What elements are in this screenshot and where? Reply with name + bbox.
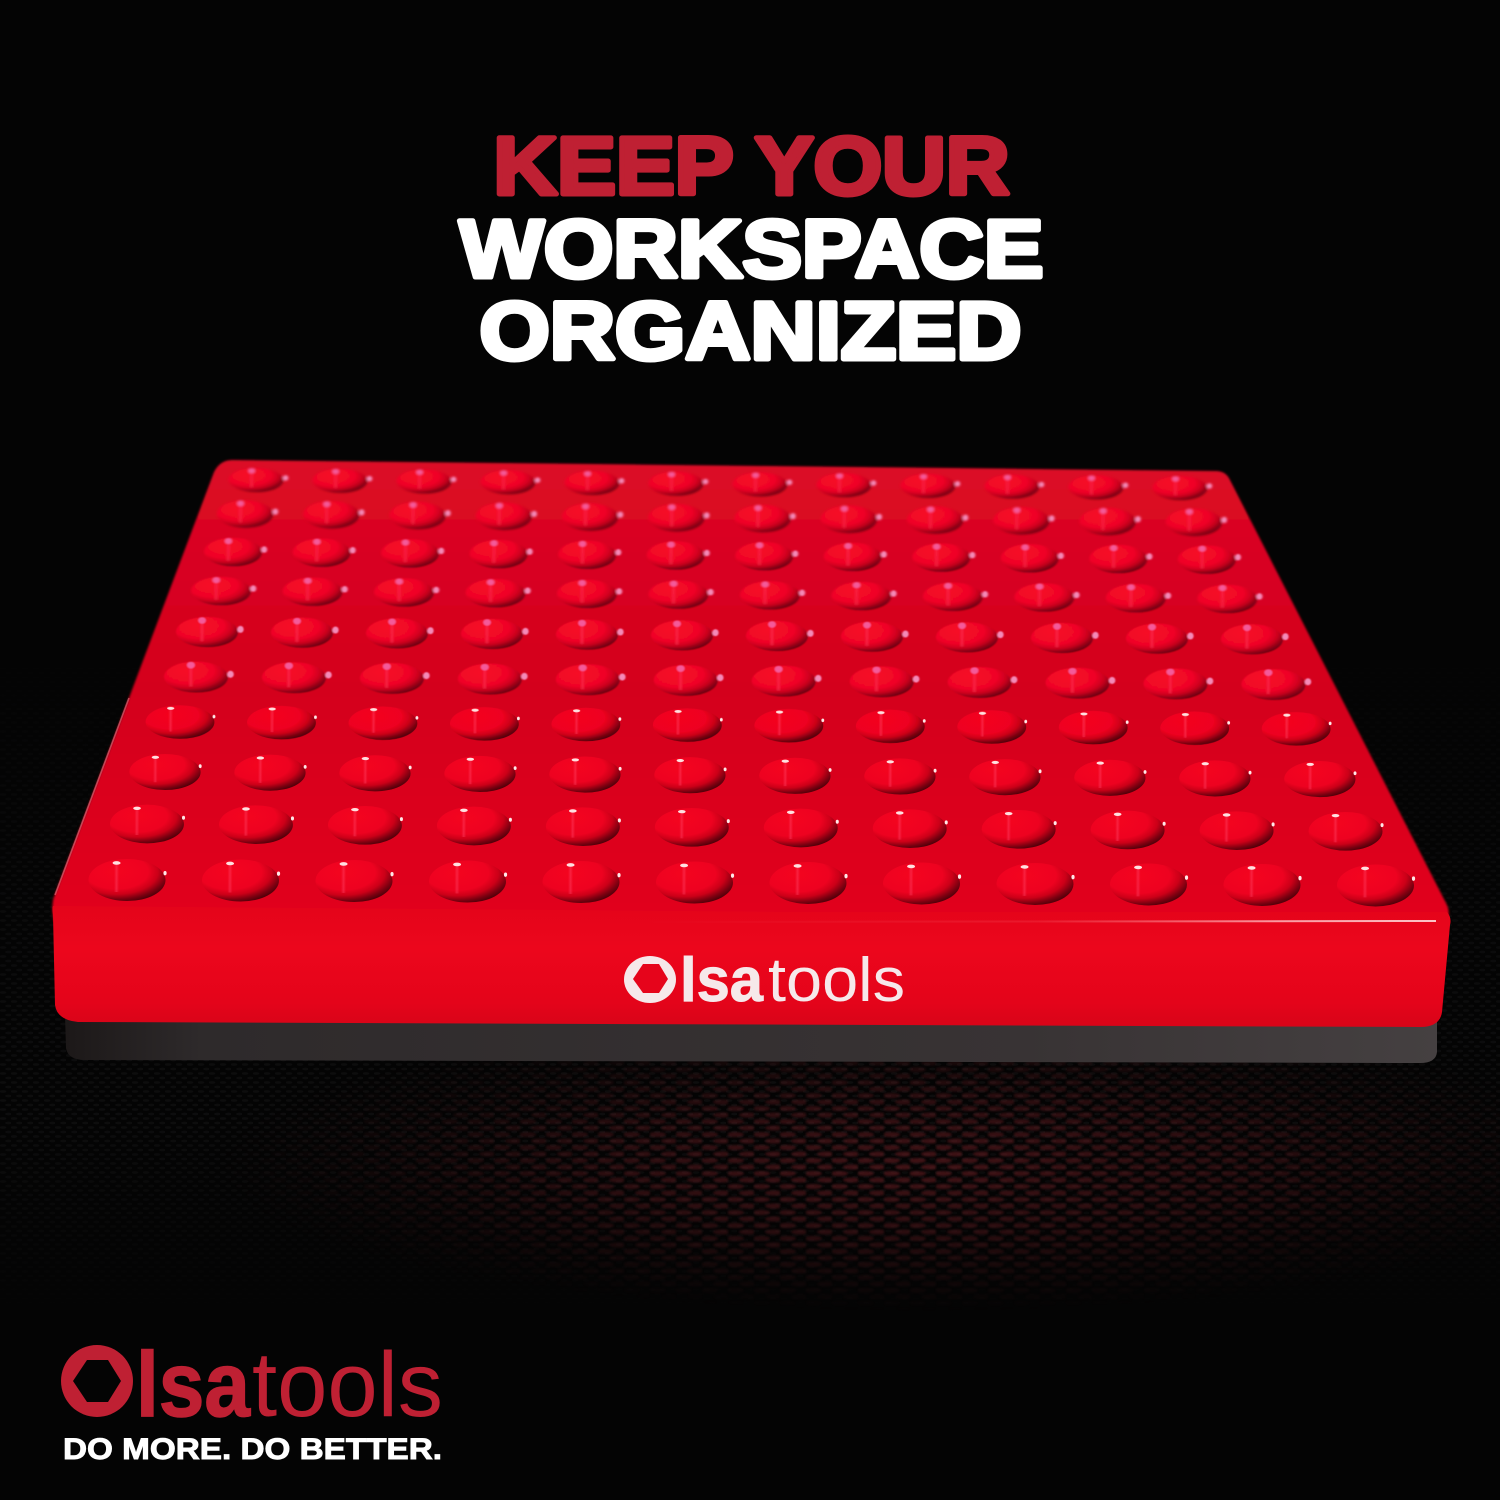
socket holes row 8 [129, 754, 1357, 797]
brand logo bottom left: O [72, 1344, 122, 1424]
title [460, 121, 1044, 377]
socket holes row 5 [176, 617, 1289, 655]
socket holes row 2 [217, 500, 1227, 536]
socket holes row 3 [204, 537, 1241, 574]
title line: workspace: WORKSPACE [460, 204, 1044, 295]
brand logo on product: tools [768, 946, 905, 1015]
socket holes row 9 [110, 804, 1384, 851]
socket holes row 7 [145, 705, 1332, 746]
socket holes row 4 [191, 576, 1263, 613]
socket holes row 1 [229, 468, 1212, 501]
socket holes row 10 [88, 859, 1415, 907]
title line: keep your: KEEP YOUR [494, 121, 1010, 212]
product: red magnetic socket holder [52, 460, 1451, 1063]
rubber base [65, 1015, 1437, 1063]
brand logo on product: O [632, 953, 668, 1009]
top surface [52, 460, 1449, 922]
front face [52, 906, 1451, 1027]
front top edge highlight [640, 921, 1436, 922]
title line: organized: ORGANIZED [480, 286, 1022, 377]
brand logo bottom left: lsa [136, 1334, 251, 1436]
brand logo on product [624, 946, 905, 1015]
brand logo bottom left [61, 1334, 443, 1436]
background: dark textured mat [0, 1019, 1500, 1291]
brand logo bottom left: tools [252, 1334, 443, 1436]
brand logo on product: lsa [680, 946, 763, 1015]
socket holes row 6 [164, 661, 1311, 700]
tagline: DO MORE. DO BETTER. [63, 1433, 442, 1466]
left edge highlight [55, 698, 129, 895]
